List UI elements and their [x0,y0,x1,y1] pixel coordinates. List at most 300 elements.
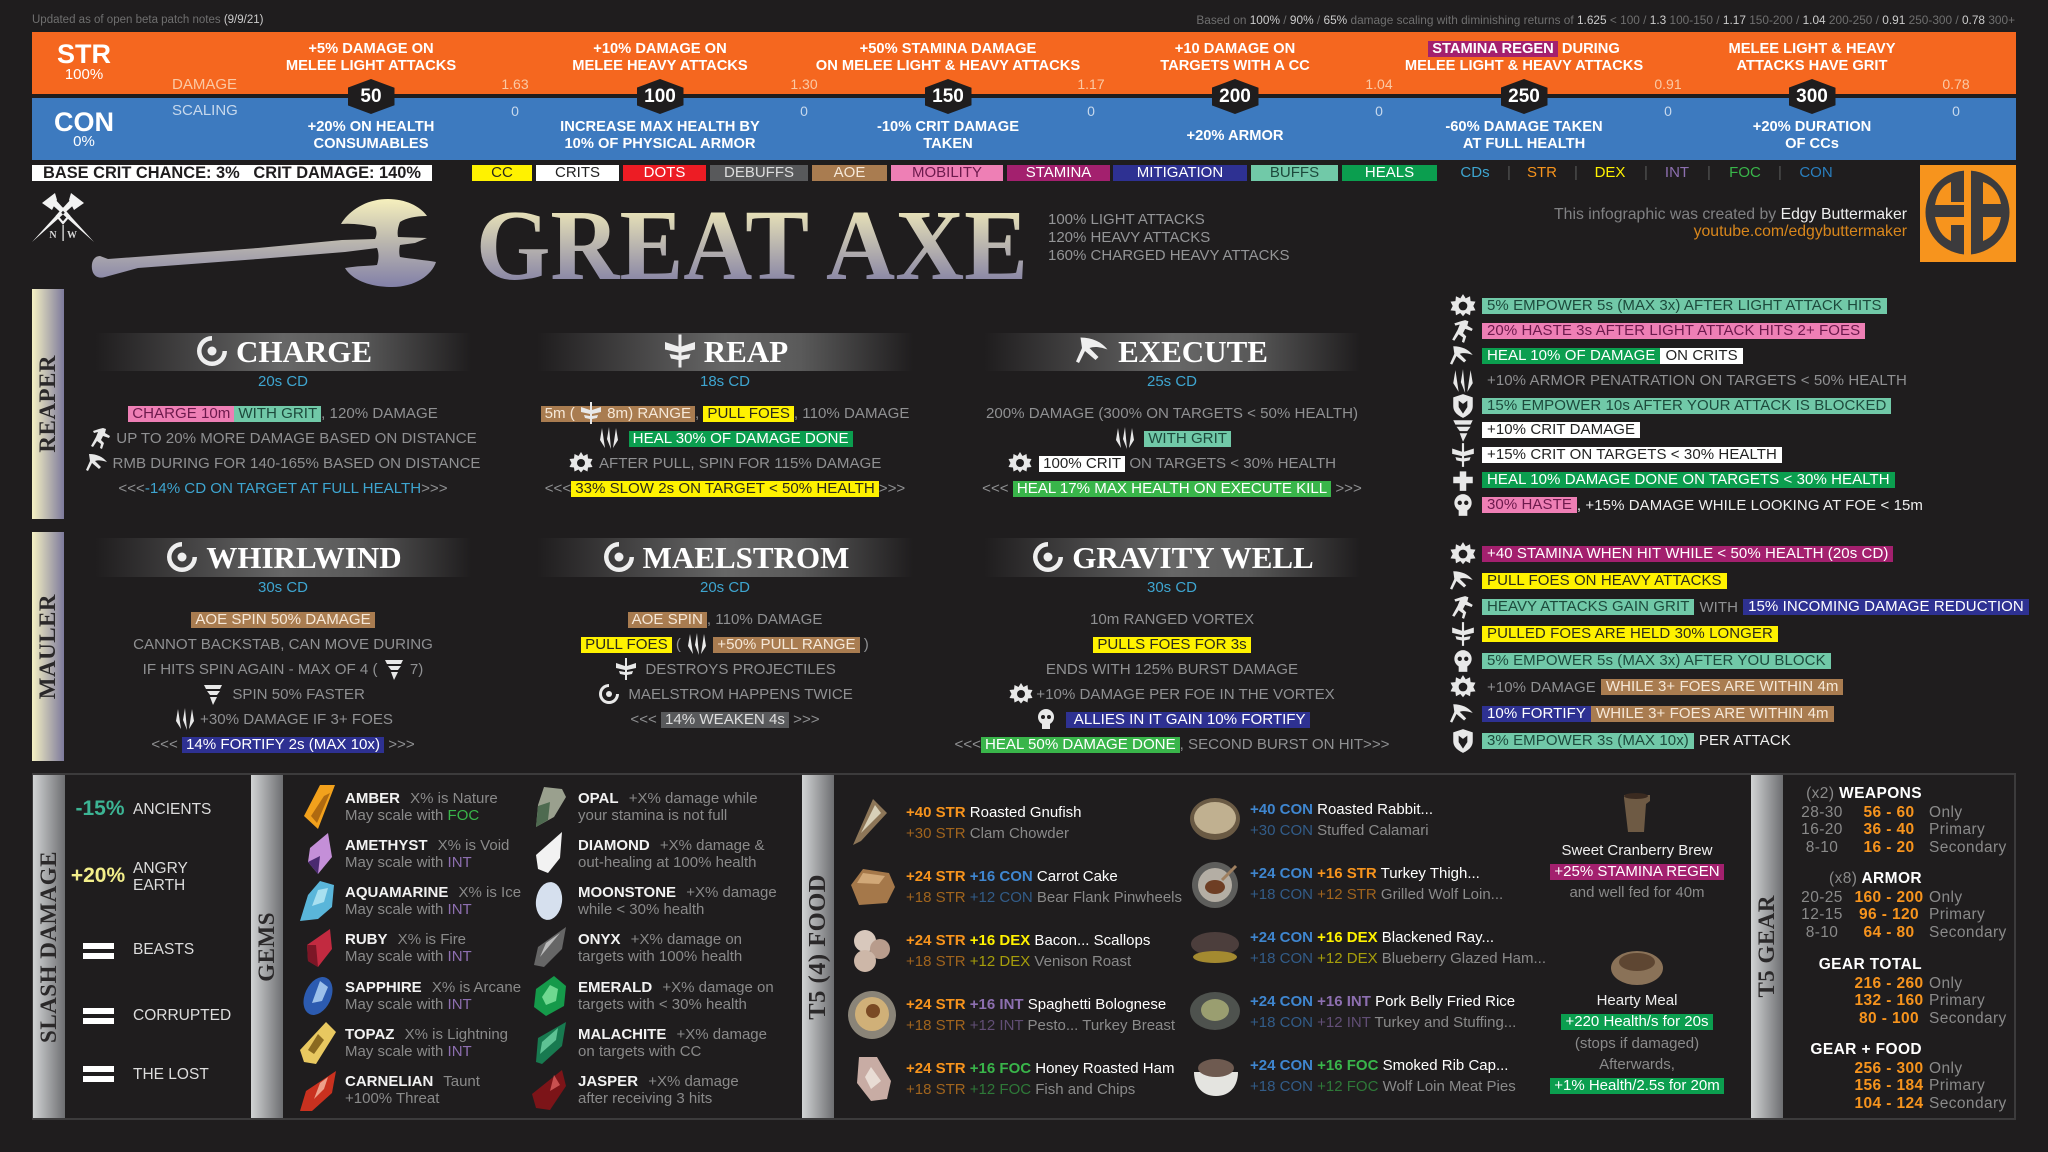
attack percentages: 120% HEAVY ATTACKS [1048,229,1210,246]
legend row: | [1644,164,1648,181]
legend row: FOC [1729,164,1761,181]
panel: mauler perks: PULL FOES ON HEAVY ATTACKS [1487,572,1722,589]
skill: Execute: WITH GRIT [1148,430,1227,447]
table: gear total: 132 - 160 [1854,992,1924,1009]
food: Bacon Scallops [854,930,1150,972]
panel: slash damage: ANGRY [133,860,188,877]
food: Sweet Cranberry Brew [1542,792,1732,904]
panel: STR and CON attribute bar: +10% DAMAGE ON [593,41,727,57]
panel: STR and CON attribute bar: 0.91 [1654,76,1682,92]
legend row: DEBUFFS [724,164,794,181]
table: armor: 160 - 200 [1854,889,1924,906]
table: weapons: 16-20 [1801,821,1843,838]
skill: Gravity Well: 30s CD [1147,579,1197,596]
gem: onyx [534,927,742,967]
table: gear + food: 256 - 300 [1854,1060,1924,1077]
panel: MAULER [32,532,64,761]
STR heading: STR [57,39,111,69]
panel: STR and CON attribute bar: SCALING [172,102,238,119]
gem: moonstone [536,882,777,920]
skill: Maelstrom: +50% PULL RANGE [717,636,856,653]
heading: REAP [704,334,788,369]
skill: Maelstrom: , 110% DAMAGE [707,611,822,628]
table: gear + food: GEAR + FOOD [1810,1041,1922,1058]
heading: gems: GEMS [254,912,279,981]
gem: sapphire: May scale with INT [345,996,472,1013]
food: Sweet Cranberry Brew: and well fed for 40m [1569,884,1705,901]
gem: amber: May scale with FOC [345,806,479,824]
icon: mug [1622,792,1652,834]
food: Carrot Cake: +24 STR +16 CON Carrot Cake [906,868,1118,884]
legend row: CRITS [555,164,600,181]
heading: gems [251,775,283,1118]
food: Smoked Rib Cap: +18 CON +12 FOC Wolf Loin Meat Pies [1250,1078,1516,1094]
table: armor: 96 - 120 [1859,906,1919,923]
food: Hearty Meal: Hearty Meal [1597,992,1677,1009]
attack percentages: 160% CHARGED HEAVY ATTACKS [1048,247,1289,264]
skill: Execute: 100% CRIT [1043,455,1121,472]
table: armor: 12-15 [1801,906,1843,923]
heading [984,333,1360,371]
panel: STR and CON attribute bar: 1.04 [1365,76,1393,92]
panel: STR and CON attribute bar: 0 [1375,103,1383,119]
table: gear + food: Secondary [1929,1095,2007,1112]
skill: Execute: ON TARGETS < 30% HEALTH [1129,455,1336,472]
heading: GRAVITY WELL [1072,540,1314,575]
gem: jasper: after receiving 3 hits [578,1090,712,1107]
credit: This infographic was created by Edgy Buttermaker [1554,206,1907,223]
legend row: DOTS [644,164,685,181]
skill: Reap: AFTER PULL, SPIN FOR 115% DAMAGE [599,455,881,472]
table: gear total: Only [1929,975,1962,992]
panel: STR and CON attribute bar: 300 [1796,86,1828,107]
table: gear + food: 104 - 124 [1854,1095,1924,1112]
icon: New World logo: N [49,230,57,241]
panel: STR and CON attribute bar: 0.78 [1942,76,1970,92]
gem: carnelian [300,1071,480,1111]
gem: malachite: MALACHITE +X% damage [578,1026,767,1043]
panel: T5 gear [1751,775,2015,1118]
skill: Whirlwind: AOE SPIN 50% DAMAGE [195,611,371,628]
gem: amber: AMBER X% is Nature [345,790,498,806]
skill: Maelstrom: ( ) [676,636,869,653]
panel: STR and CON attribute bar: MELEE LIGHT & HEAVY ATTACKS [1405,58,1643,74]
food: Roasted Rabbit: +40 CON Roasted Rabbit... [1250,800,1433,818]
food: Turkey Thigh [1190,858,1530,908]
food: Sweet Cranberry Brew: Sweet Cranberry Brew [1562,842,1712,859]
skill: Maelstrom: <<< >>> [630,711,820,728]
skill: Execute [982,333,1362,497]
gem: opal: your stamina is not full [578,806,727,824]
food: Honey Roasted Ham [847,1053,1187,1103]
skill: Whirlwind: +30% DAMAGE IF 3+ FOES [200,711,393,728]
panel: STR and CON attribute bar: INCREASE MAX HEALTH BY [560,118,760,134]
panel: STR and CON attribute bar: ATTACKS HAVE GRIT [1737,58,1887,74]
food: Roasted Rabbit [1190,794,1530,844]
legend row: | [1507,164,1511,181]
panel: STR and CON attribute bar: 1.30 [790,76,818,92]
panel: STR and CON attribute bar: +20% ON HEALTH [308,118,434,134]
table: weapons: 56 - 60 [1863,804,1915,821]
gem: topaz: TOPAZ X% is Lightning [345,1026,508,1043]
panel: STR and CON attribute bar: 0 [800,103,808,119]
CON heading: CON [54,107,114,137]
icon: New World logo [32,193,94,242]
gem: topaz [300,1022,508,1064]
legend row: | [1778,164,1782,181]
skill: Maelstrom: AOE SPIN [632,611,703,628]
food: Sweet Cranberry Brew: +25% STAMINA REGEN [1554,863,1720,880]
panel: STR and CON attribute bar: -60% DAMAGE TAKEN [1445,118,1603,134]
panel: slash damage: CORRUPTED [133,1007,231,1024]
panel: STR and CON attribute bar: TARGETS WITH A CC [1160,58,1310,74]
scaling note: Based on 100% / 90% / 65% damage scaling with diminishing returns of 1.625 < 100 / 1.3 100-150 / 1.17 150-200 / 1.04 200-250 / 0.91 250-300 / 0.78 300+ [1196,13,2015,27]
gem: ruby: RUBY X% is Fire [345,931,466,948]
icon: New World logo: W [67,230,77,241]
food: Blackened Ray: +24 CON +16 DEX Blackened Ray... [1250,928,1494,946]
food: Spaghetti Bolognese: +18 STR +12 INT Pesto... Turkey Breast [906,1016,1175,1034]
heading: WHIRLWIND [206,540,402,575]
panel: reaper perks: +10% CRIT DAMAGE [1487,421,1635,438]
table: armor: 8-10 [1806,924,1838,941]
panel: mauler perks: WITH [1699,599,1738,616]
panel: STR and CON attribute bar: 0% [73,133,95,150]
food: Roasted Gnufish: +40 STR Roasted Gnufish [906,804,1082,820]
skill: Execute: 200% DAMAGE (300% ON TARGETS < 50% HEALTH) [986,405,1358,422]
skill: Reap: , , 110% DAMAGE [695,405,909,422]
gem: onyx: ONYX +X% damage on [578,931,742,948]
panel: slash damage: -15% [75,797,125,820]
panel: STR and CON attribute bar: -10% CRIT DAMAGE [877,118,1019,134]
food: Pork Belly Fried Rice: +24 CON +16 INT Pork Belly Fried Rice [1250,992,1515,1010]
table: armor: 64 - 80 [1863,924,1915,941]
skill: Maelstrom: 20s CD [700,579,750,596]
food: Turkey Thigh: +24 CON +16 STR Turkey Thigh... [1250,864,1480,882]
food: Honey Roasted Ham: +18 STR +12 FOC Fish and Chips [906,1080,1135,1098]
food: Hearty Meal: +220 Health/s for 20s [1565,1013,1708,1030]
food: Bacon Scallops: +24 STR +16 DEX Bacon... Scallops [906,932,1150,948]
panel: reaper perks: HEAL 10% DAMAGE DONE ON TARGETS < 30% HEALTH [1487,471,1890,488]
skill: Maelstrom: MAELSTROM HAPPENS TWICE [628,686,853,703]
panel: STR and CON attribute bar: 0 [511,103,519,119]
table: weapons: Only [1929,804,1962,821]
table: armor: Primary [1929,906,1985,923]
gem: malachite [536,1022,767,1064]
panel: mauler perks: 10% FORTIFY [1487,705,1586,722]
panel: slash damage: EARTH [133,877,185,894]
food: Spaghetti Bolognese: +24 STR +16 INT Spaghetti Bolognese [906,996,1166,1012]
panel: STR and CON attribute bar: 200 [1219,86,1251,107]
panel: mauler perks: 15% INCOMING DAMAGE REDUCTION [1748,598,2024,615]
panel: STR and CON attribute bar: +20% ARMOR [1186,128,1284,144]
food: Hearty Meal [1542,945,1732,1097]
heading [537,538,913,577]
skill: Charge: <<<-14% CD ON TARGET AT FULL HEALTH>>> [118,480,448,497]
heading: MAELSTROM [643,540,849,575]
legend row: BUFFS [1270,164,1319,181]
skill: Charge: RMB DURING FOR 140-165% BASED ON DISTANCE [113,455,480,472]
gem: malachite: on targets with CC [578,1043,701,1060]
gem: emerald: EMERALD +X% damage on [578,979,774,996]
panel: reaper perks: , +15% DAMAGE WHILE LOOKING AT FOE < 15m [1577,497,1923,514]
attack percentages: 100% LIGHT ATTACKS [1048,211,1205,228]
panel: STR and CON attribute bar: 150 [932,86,964,107]
legend row: INT [1665,164,1689,181]
food: Smoked Rib Cap [1190,1050,1530,1100]
skill: Whirlwind [116,538,456,753]
gem: aquamarine: May scale with INT [345,901,472,918]
panel: reaper perks: ON CRITS [1665,347,1738,364]
food: Roasted Gnufish [853,799,1082,845]
panel: STR and CON attribute bar: MELEE LIGHT & HEAVY [1728,41,1896,57]
panel: reaper perks: 5% EMPOWER 5s (MAX 3x) AFTER LIGHT ATTACK HITS [1487,297,1882,314]
panel: STR and CON attribute bar: +5% DAMAGE ON [308,41,434,57]
food: Roasted Rabbit: +30 CON Stuffed Calamari [1250,822,1429,838]
legend row: AOE [834,164,865,181]
skill: Execute: HEAL 17% MAX HEALTH ON EXECUTE KILL [1017,480,1327,497]
food: Spaghetti Bolognese [848,991,1175,1039]
skill: Gravity Well: ENDS WITH 125% BURST DAMAGE [1046,661,1298,678]
panel: STR and CON attribute bar [32,32,2016,160]
table: gear total [1751,956,2015,1030]
panel: STR and CON attribute bar: ON MELEE LIGHT & HEAVY ATTACKS [816,58,1080,74]
heading [984,538,1360,577]
panel: slash damage: ANCIENTS [133,801,211,818]
table: gear + food: Only [1929,1060,1962,1077]
table: gear total: 216 - 260 [1854,975,1924,992]
heading [537,333,913,371]
panel: STR and CON attribute bar: DAMAGE [172,76,237,93]
gem: moonstone: MOONSTONE +X% damage [578,884,777,901]
skill: Maelstrom [558,538,898,728]
panel: reaper perks: +10% ARMOR PENATRATION ON TARGETS < 50% HEALTH [1487,372,1907,389]
gem: diamond [536,832,764,873]
gem: amethyst: May scale with INT [345,854,472,871]
panel: STR and CON attribute bar: +20% DURATION [1753,118,1871,134]
table: gear + food: Primary [1929,1077,1985,1094]
table: weapons: (x2) WEAPONS [1806,785,1922,802]
skill: Charge: UP TO 20% MORE DAMAGE BASED ON DISTANCE [116,430,477,447]
panel: STR and CON attribute bar: +10 DAMAGE ON [1175,41,1295,57]
panel: mauler perks: WHILE 3+ FOES ARE WITHIN 4m [1596,705,1829,722]
table: weapons: Primary [1929,821,1985,838]
panel: T5 food [802,775,1724,1118]
gem: amethyst: AMETHYST X% is Void [345,837,509,854]
legend row: | [1707,164,1711,181]
skill: Maelstrom: PULL FOES [585,636,668,653]
food: Hearty Meal: (stops if damaged) [1575,1035,1699,1052]
food: Carrot Cake [851,868,1182,906]
panel: mauler perks: PULLED FOES ARE HELD 30% LONGER [1487,625,1773,642]
legend row: CON [1799,164,1833,181]
heading: gear [1751,775,1783,1118]
panel: slash damage: THE LOST [133,1066,209,1083]
panel: STR and CON attribute bar: MELEE HEAVY ATTACKS [572,58,748,74]
gem: emerald: targets with < 30% health [578,996,747,1013]
table: gear + food [1751,1041,2015,1115]
panel: mauler perks: HEAVY ATTACKS GAIN GRIT [1487,598,1689,615]
skill: Gravity Well: ALLIES IN IT GAIN 10% FORTIFY [1074,711,1306,728]
heading: CHARGE [236,334,372,369]
gem: jasper: JASPER +X% damage [578,1073,739,1090]
gem: carnelian: +100% Threat [345,1090,439,1107]
panel: mauler perks: WHILE 3+ FOES ARE WITHIN 4m [1606,678,1838,695]
legend row: DEX [1595,164,1625,181]
skill: Whirlwind: SPIN 50% FASTER [232,686,365,703]
skill: Gravity Well: PULLS FOES FOR 3s [1097,636,1247,653]
skill: Gravity Well: 10m RANGED VORTEX [1090,611,1254,628]
panel: reaper perks: +15% CRIT ON TARGETS < 30% HEALTH [1487,446,1777,463]
panel: REAPER [32,289,64,519]
table: gear total: 80 - 100 [1859,1010,1919,1027]
heading [95,538,471,577]
table: weapons: 36 - 40 [1863,821,1915,838]
skill: Execute: <<< >>> [982,480,1362,497]
skill: Gravity Well: HEAL 50% DAMAGE DONE [985,736,1176,753]
panel: reaper perks: 15% EMPOWER 10s AFTER YOUR ATTACK IS BLOCKED [1487,396,1886,414]
table: armor: 20-25 [1801,889,1843,906]
food: Blackened Ray [1190,922,1530,972]
skill: Reap: HEAL 30% OF DAMAGE DONE [633,430,849,447]
skill: Reap: 18s CD [700,373,750,390]
gem: emerald [534,976,774,1016]
heading: REAPER: REAPER [35,355,60,453]
heading: MAULER: MAULER [35,594,60,699]
gem: opal: OPAL +X% damage while [578,790,758,806]
panel: STR and CON attribute bar: 1.17 [1077,76,1105,92]
table: armor [1751,870,2015,944]
panel: STR and CON attribute bar: 0 [1664,103,1672,119]
panel: mauler perks: +40 STAMINA WHEN HIT WHILE < 50% HEALTH (20s CD) [1487,545,1888,562]
legend row: | [1574,164,1578,181]
food: Pork Belly Fried Rice [1190,986,1530,1036]
food: Hearty Meal: +1% Health/2.5s for 20m [1554,1077,1720,1094]
skill: Execute: 25s CD [1147,373,1197,390]
table: gear total: Primary [1929,992,1985,1009]
table: armor: Secondary [1929,924,2007,941]
panel: slash damage: BEASTS [133,941,194,958]
legend row: MOBILITY [912,164,982,181]
skill: Maelstrom: 14% WEAKEN 4s [665,711,785,728]
legend row: MITIGATION [1137,164,1223,181]
skill: Maelstrom: DESTROYS PROJECTILES [645,661,836,678]
panel: STR and CON attribute bar: CONSUMABLES [313,136,429,152]
panel: mauler perks: 3% EMPOWER 3s (MAX 10x) [1487,732,1689,749]
food: Hearty Meal: Afterwards, [1599,1056,1675,1073]
skill: Gravity Well [955,538,1389,753]
skill: Whirlwind: CANNOT BACKSTAB, CAN MOVE DURING [133,636,433,653]
base crit box: BASE CRIT CHANCE: 3% CRIT DAMAGE: 140% [43,164,421,182]
food: Pork Belly Fried Rice: +18 CON +12 INT Turkey and Stuffing... [1250,1014,1516,1030]
skill: Reap: 33% SLOW 2s ON TARGET < 50% HEALTH [575,480,875,497]
icon: great axe [92,199,436,287]
table: weapons: 8-10 [1806,839,1838,856]
food: Blackened Ray: +18 CON +12 DEX Blueberry Glazed Ham... [1250,950,1546,966]
gem: ruby [307,929,472,967]
legend row: STAMINA [1026,164,1091,181]
table: weapons [1751,785,2015,859]
panel: STR and CON attribute bar: TAKEN [923,136,973,152]
skill: Whirlwind: <<< >>> [151,736,415,753]
panel: STR and CON attribute bar: OF CCs [1785,136,1839,152]
gem: opal [536,787,758,827]
credit: youtube.com/edgybuttermaker [1694,223,1907,240]
panel: STR and CON attribute bar: 250 [1508,86,1540,107]
gem: ruby: May scale with INT [345,948,472,965]
skill: Charge [86,333,480,497]
skill: Whirlwind: 30s CD [258,579,308,596]
table: armor: Only [1929,889,1962,906]
heading: food [802,775,834,1118]
panel: STR and CON attribute bar: 10% OF PHYSICAL ARMOR [565,136,755,152]
panel: bottom frame [32,773,2016,1120]
legend row: STR [1527,164,1557,181]
skill: Whirlwind: 14% FORTIFY 2s (MAX 10x) [186,736,380,753]
gem: onyx: targets with 100% health [578,948,742,965]
skill: Charge: CHARGE 10m [132,405,230,422]
panel: STR and CON attribute bar: MELEE LIGHT ATTACKS [286,58,456,74]
gem: amber [304,785,498,829]
skill: Reap: PULL FOES [707,405,790,422]
heading [95,333,471,371]
gem: jasper [532,1070,739,1110]
gem: carnelian: CARNELIAN Taunt [345,1073,480,1090]
table: weapons: 28-30 [1801,804,1843,821]
panel: STR and CON attribute bar: 50 [360,86,382,107]
food: Roasted Gnufish: +30 STR Clam Chowder [906,824,1069,842]
food: Turkey Thigh: +18 CON +12 STR Grilled Wolf Loin... [1250,886,1503,902]
skill: Whirlwind: IF HITS SPIN AGAIN - MAX OF 4 ( 7) [143,661,423,678]
legend row: CC [491,164,513,181]
skill: Charge: 20s CD [258,373,308,390]
skill: Charge: WITH GRIT [238,405,317,422]
heading: gear: T5 GEAR [1754,895,1779,998]
credit [1554,206,1907,240]
icon: plate [1610,948,1664,986]
table: gear total: GEAR TOTAL [1819,956,1922,973]
food: Carrot Cake: +18 STR +12 CON Bear Flank Pinwheels [906,888,1182,906]
skill: Reap: 5m ( 8m) RANGE [545,405,691,422]
panel: STR and CON attribute bar: 100 [644,86,676,107]
table: weapons: Secondary [1929,839,2007,856]
panel: slash damage [33,775,231,1118]
skill: Gravity Well: <<< , SECOND BURST ON HIT>>> [955,736,1389,753]
gem: amethyst [308,833,509,874]
gem: topaz: May scale with INT [345,1043,472,1060]
panel: mauler perks: 5% EMPOWER 5s (MAX 3x) AFTER YOU BLOCK [1487,652,1826,669]
skill: Gravity Well: +10% DAMAGE PER FOE IN THE VORTEX [1036,686,1335,703]
panel: mauler perks: PER ATTACK [1699,732,1791,749]
panel: STR and CON attribute bar: +50% STAMINA DAMAGE [860,41,1036,57]
heading: EXECUTE [1118,334,1268,369]
heading: food: T5 (4) FOOD [804,874,831,1019]
panel: mauler perks [1450,542,2029,753]
skill: Reap: <<< >>> [545,480,905,497]
food: Honey Roasted Ham: +24 STR +16 FOC Honey Roasted Ham [906,1060,1174,1076]
attack percentages [1048,211,1289,264]
gem: sapphire: SAPPHIRE X% is Arcane [345,979,521,996]
panel: STR and CON attribute bar: 1.63 [501,76,529,92]
panel: mauler perks: +10% DAMAGE [1487,679,1596,696]
food: Bacon Scallops: +18 STR +12 DEX Venison Roast [906,952,1131,970]
food: Smoked Rib Cap: +24 CON +16 FOC Smoked Rib Cap... [1250,1056,1508,1074]
panel: STR and CON attribute bar: 0 [1087,103,1095,119]
table: weapons: 16 - 20 [1863,839,1915,856]
panel: reaper perks: HEAL 10% OF DAMAGE [1487,347,1655,364]
panel: STR and CON attribute bar: AT FULL HEALTH [1463,136,1585,152]
table: gear total: Secondary [1929,1010,2007,1027]
icon: EB logo [1920,165,2016,262]
